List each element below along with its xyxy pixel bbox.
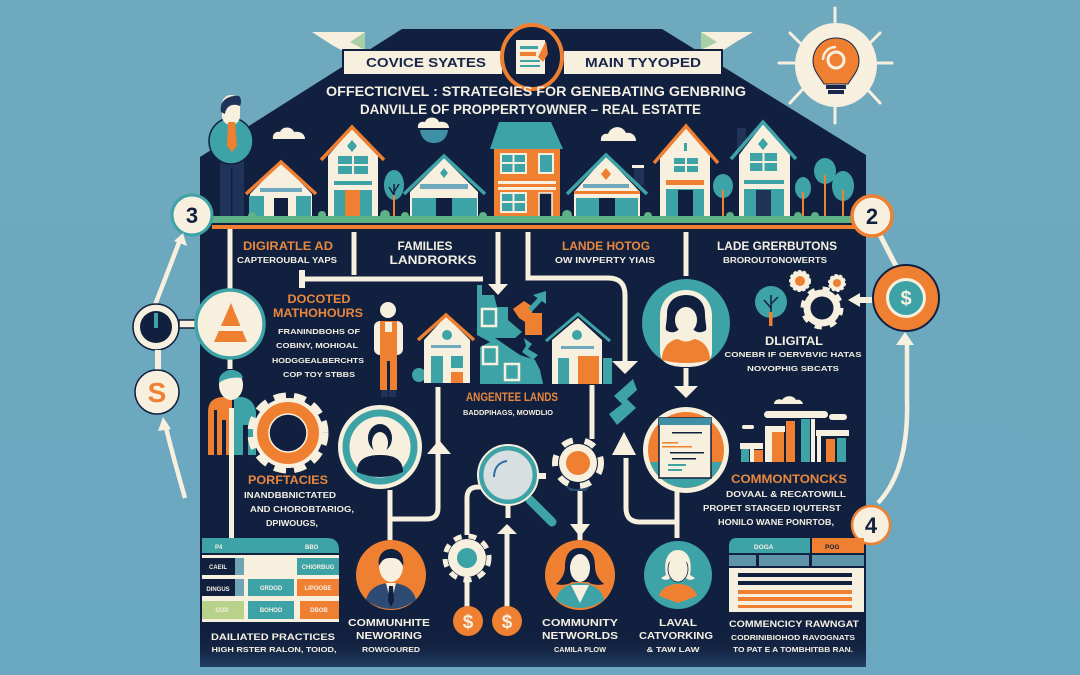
table left: LIPOOBE	[304, 586, 332, 592]
circle: cone icon	[196, 290, 264, 358]
banner right	[563, 50, 722, 75]
text: docoted mathohours: COBINY, MOHIOAL	[276, 341, 359, 350]
text: dailiated practices	[211, 632, 336, 654]
banner left: COVICE SYATES	[366, 56, 486, 70]
ground strip	[212, 210, 860, 229]
ribbon tail right	[701, 32, 753, 51]
text: digital: CONEBR IF OERVBVIC HATAS	[724, 350, 862, 359]
text: commencicy rawngat: CODRINIBIOHOD RAVOGNATS	[731, 633, 855, 642]
icon: dollar coin 1	[453, 606, 483, 636]
curved line to badge 4	[878, 332, 914, 503]
title: OFFECTICIVEL : STRATEGIES FOR GENEBATING GENBRING	[326, 84, 746, 99]
connector clock to S	[155, 350, 161, 370]
trees right	[713, 158, 854, 217]
man in suit	[209, 95, 253, 218]
table left: DINGUS	[206, 587, 230, 593]
bar chart	[740, 396, 849, 462]
text: families	[390, 241, 477, 267]
navy house-shaped panel	[200, 29, 866, 667]
text: laval catvorking	[639, 617, 713, 654]
icon: dollar coin 2	[492, 606, 522, 636]
icon: dollar coin 1: $	[463, 612, 474, 633]
text: porftacies: INANDBBNICTATED	[244, 491, 336, 500]
icon: teal lightning	[609, 379, 637, 425]
text: lande hotog: OW INVPERTY YIAIS	[555, 256, 656, 265]
cloud right	[601, 127, 636, 141]
text: dailiated practices: DAILIATED PRACTICES	[211, 632, 335, 643]
circle: person	[338, 405, 422, 489]
tree	[384, 170, 404, 217]
text: communhite: COMMUNHITE	[348, 617, 430, 629]
arrow up to badge 3	[155, 233, 187, 305]
small house	[546, 314, 612, 384]
text: families: LANDRORKS	[390, 255, 477, 267]
line through man	[229, 408, 234, 540]
icon: orange gear small	[555, 440, 601, 491]
text: community networlds: COMMUNITY	[542, 617, 618, 629]
icon: orange gear	[251, 396, 325, 470]
text: laval catvorking: LAVAL	[659, 617, 698, 629]
text: docoted mathohours: FRANINDBOHS OF	[278, 327, 360, 336]
text: digital: NOVOPHIG SBCATS	[747, 364, 839, 373]
table right	[729, 538, 864, 612]
circle: woman teal lower	[644, 541, 712, 609]
connector lines	[230, 229, 686, 607]
circle: woman teal	[642, 279, 730, 367]
text: lade grerbutons	[717, 241, 837, 265]
text: docoted mathohours: HODGGEALBERCHTS	[272, 356, 364, 365]
house lower left	[412, 315, 474, 383]
cloud centre	[418, 118, 449, 143]
title	[326, 84, 746, 117]
text: porftacies: DPIWOUGS,	[266, 519, 318, 528]
text: communhite	[348, 617, 430, 654]
circle: document	[643, 407, 729, 493]
circle: clock	[133, 304, 179, 350]
badge 4	[852, 506, 890, 544]
text: community networlds	[542, 617, 618, 654]
text: docoted mathohours: COP TOY STBBS	[283, 370, 355, 379]
badge 2: 2	[866, 204, 878, 229]
table right: DOGA	[754, 544, 774, 551]
table right: POG	[825, 544, 839, 551]
icon: dollar coin 2: $	[502, 612, 513, 633]
circle: man orange	[356, 540, 426, 610]
badge 4: 4	[865, 513, 878, 538]
ribbon tail left	[312, 32, 365, 51]
text: commencicy rawngat: TO PAT E A TOMBHITBB RAN.	[733, 645, 853, 654]
table left: DBOB	[310, 608, 328, 614]
circle: dollar S	[135, 370, 179, 414]
circle: dollar right	[873, 265, 939, 331]
icon: teal gear	[445, 536, 489, 580]
cloud left	[273, 128, 305, 139]
text: commontoncks: HONILO WANE PONRTOB,	[718, 518, 834, 527]
table left: P4	[215, 545, 223, 551]
text: angentee lands: ANGENTEE LANDS	[466, 392, 558, 404]
text: digirate ad	[237, 241, 338, 265]
title: DANVILLE OF PROPPERTYOWNER – REAL ESTATTE	[360, 102, 701, 117]
man with gear	[208, 370, 256, 455]
table left	[202, 538, 339, 622]
banner left	[343, 50, 503, 75]
icon: magnifier	[478, 445, 552, 522]
text: docoted mathohours: MATHOHOURS	[273, 308, 363, 320]
text: community networlds: NETWORLDS	[542, 630, 618, 642]
icon: document emblem	[502, 25, 562, 89]
text: commontoncks: COMMONTONCKS	[731, 474, 847, 486]
worker figure	[374, 302, 403, 397]
icon: small gears	[790, 271, 845, 291]
text: laval catvorking: CATVORKING	[639, 630, 713, 642]
table left: CAEIL	[209, 565, 227, 571]
text: porftacies: AND CHOROBTARIOG,	[250, 505, 354, 514]
table left: BBO	[305, 545, 319, 551]
house 2	[321, 127, 384, 217]
table left: GUD	[215, 608, 229, 614]
arrowheads	[299, 270, 873, 537]
house 5	[567, 155, 647, 217]
badge 3	[172, 195, 212, 235]
house row	[246, 122, 854, 217]
text: digirate ad: CAPTEROUBAL YAPS	[237, 256, 338, 265]
text: digital: DLIGITAL	[765, 336, 823, 348]
text: angentee lands	[463, 392, 558, 417]
text: commencicy rawngat: COMMENCICY RAWNGAT	[729, 619, 859, 630]
house 4 centre orange	[490, 122, 563, 217]
badge 2	[852, 196, 892, 236]
text: commontoncks	[703, 474, 847, 527]
line from badge 2 to dollar	[880, 235, 897, 268]
text: lande hotog	[555, 241, 656, 265]
text: commontoncks: PROPET STARGED IQUTERST	[703, 504, 841, 513]
table left: GRDOD	[260, 586, 283, 592]
text: commencicy rawngat	[729, 619, 859, 654]
text: communhite: NEWORING	[356, 630, 422, 642]
table left: CHIORBUG	[302, 565, 335, 571]
text: lade grerbutons: BROROUTONOWERTS	[723, 256, 828, 265]
text: porftacies: PORFTACIES	[248, 475, 328, 487]
text: angentee lands: BADDPIHAGS, MOWDLIO	[463, 408, 553, 417]
curved arrow lower left	[158, 417, 185, 498]
icon: large gear	[803, 289, 841, 327]
text: digital	[724, 336, 862, 373]
table left: BOHOD	[260, 608, 283, 614]
text: community networlds: CAMILA PLOW	[554, 645, 607, 654]
tree icon	[755, 286, 787, 326]
text: communhite: ROWGOURED	[362, 645, 421, 654]
connector clock to cone	[179, 320, 196, 328]
badge 3: 3	[186, 203, 198, 228]
banner right: MAIN TYYOPED	[585, 56, 701, 70]
house 1	[246, 162, 316, 217]
icon: light bulb	[779, 8, 892, 123]
text: lade grerbutons: LADE GRERBUTONS	[717, 241, 837, 253]
text: docoted mathohours: DOCOTED	[288, 294, 350, 306]
circle: dollar right: $	[900, 288, 912, 310]
text: dailiated practices: HIGH RSTER RALON, TOIOD,	[212, 645, 336, 654]
house 6	[654, 126, 718, 217]
circle: woman orange	[545, 540, 615, 610]
circle: dollar S: S	[148, 377, 166, 408]
teal stairs with arrows	[477, 285, 546, 384]
text: laval catvorking: & TAW LAW	[646, 645, 701, 654]
text: docoted mathohours	[272, 294, 364, 379]
house 3	[404, 156, 485, 217]
house 7	[731, 122, 796, 217]
text: commontoncks: DOVAAL & RECATOWILL	[726, 490, 846, 499]
text: lande hotog: LANDE HOTOG	[562, 241, 650, 253]
text: digirate ad: DIGIRATLE AD	[243, 241, 333, 253]
text: porftacies	[244, 475, 354, 528]
text: families: FAMILIES	[398, 241, 453, 253]
